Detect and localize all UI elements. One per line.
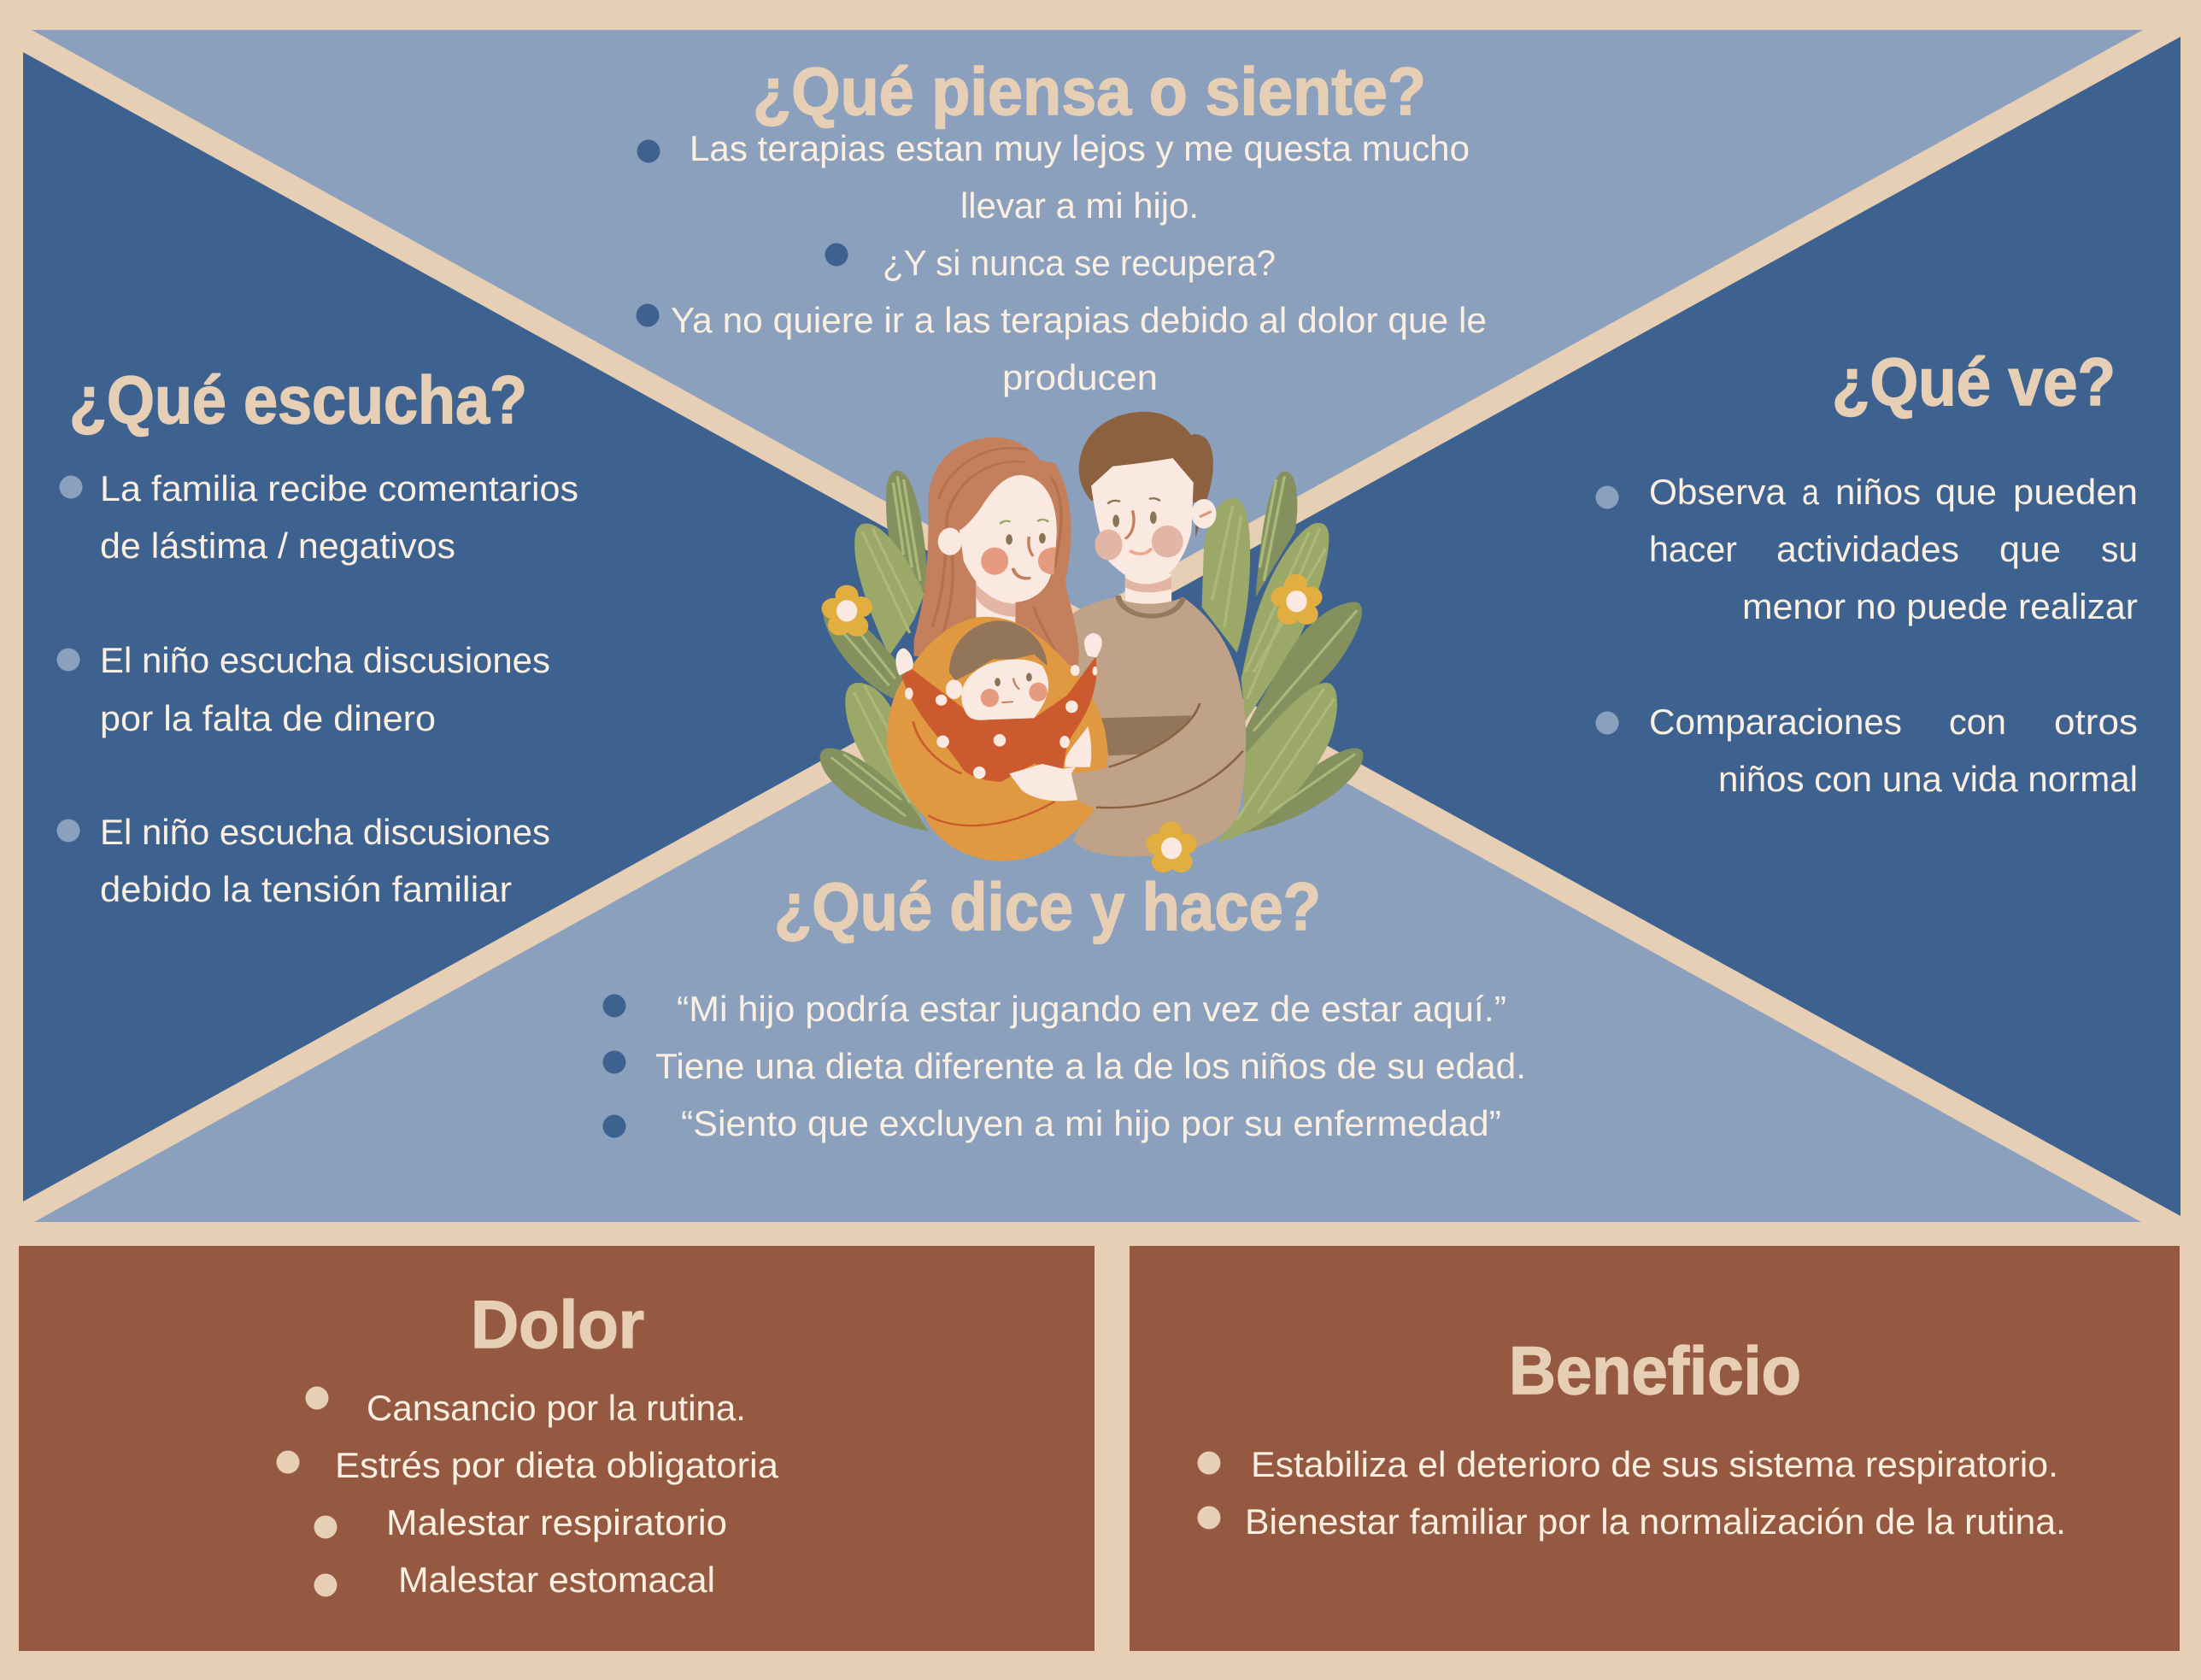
bullet list: lo que ve: hacer bbox=[1649, 529, 1737, 569]
bullet list: lo que ve: Observa bbox=[1649, 472, 1787, 512]
icon: man bbox=[1067, 412, 1246, 856]
panel: qué ve bbox=[1111, 37, 2180, 1216]
bullet list: lo que ve: actividades bbox=[1776, 529, 1959, 569]
bullet list: lo que ve: a bbox=[1802, 472, 1820, 512]
heading: qué escucha: ¿Qué escucha? bbox=[69, 361, 527, 438]
bullet list: pensamientos: Ya no quiere ir a las terapias debido al dolor que le bbox=[671, 300, 1487, 340]
bullet list: beneficios: Bienestar familiar por la normalización de la rutina. bbox=[1245, 1501, 2066, 1542]
bullet list: dolores: Cansancio por la rutina. bbox=[367, 1388, 746, 1428]
icon: baby bbox=[895, 620, 1102, 782]
bullet list: pensamientos: ¿Y si nunca se recupera? bbox=[883, 243, 1276, 283]
heading: dolor: Dolor bbox=[471, 1286, 644, 1362]
bullet list: lo que escucha: El niño escucha discusiones bbox=[100, 640, 550, 680]
bullet list: lo que escucha bbox=[56, 468, 578, 909]
heading: qué ve: ¿Qué ve? bbox=[1832, 344, 2116, 420]
bullet list: lo que ve: otros bbox=[2054, 702, 2138, 742]
bullet list: lo que ve bbox=[1596, 472, 2138, 799]
bullet list: lo que escucha: La familia recibe comentarios bbox=[100, 468, 578, 508]
bullet list: beneficios bbox=[1198, 1444, 2066, 1542]
bullet list: dolores: Estrés por dieta obligatoria bbox=[335, 1445, 779, 1485]
panel: beneficio bbox=[1130, 1246, 2180, 1651]
bullet list: pensamientos bbox=[636, 128, 1487, 397]
icon: left leaves bbox=[820, 471, 935, 831]
bullet list: dolores: Malestar estomacal bbox=[398, 1560, 715, 1600]
heading: beneficio: Beneficio bbox=[1509, 1332, 1801, 1408]
bullet list: dolores bbox=[277, 1386, 779, 1600]
bullet list: lo que ve: niños con una vida normal bbox=[1718, 759, 2138, 799]
bullet list: lo que ve: que bbox=[1935, 472, 1997, 512]
bullet list: lo que escucha: de lástima / negativos bbox=[100, 526, 455, 566]
bullet list: lo que ve: con bbox=[1949, 702, 2006, 742]
bullet list: lo que ve: que bbox=[1999, 529, 2061, 569]
bullet list: lo que ve: Comparaciones bbox=[1649, 702, 1902, 742]
panel: qué dice y hace bbox=[34, 640, 2141, 1222]
heading: qué piensa o siente: ¿Qué piensa o siente? bbox=[753, 53, 1426, 129]
bullet list: pensamientos: llevar a mi hijo. bbox=[960, 185, 1199, 226]
bullet list: dichos y acciones bbox=[603, 989, 1526, 1143]
panel: qué piensa o siente bbox=[32, 30, 2143, 613]
panel: qué escucha bbox=[23, 52, 1065, 1201]
bullet list: dolores: Malestar respiratorio bbox=[386, 1502, 727, 1542]
bullet list: dichos y acciones: Tiene una dieta diferente a la de los niños de su edad. bbox=[655, 1046, 1526, 1086]
bullet list: lo que ve: menor no puede realizar bbox=[1742, 586, 2138, 626]
panel: dolor bbox=[19, 1246, 1095, 1651]
icon: man's arm and hand bbox=[1009, 703, 1243, 810]
icon: flowers bbox=[822, 574, 1323, 872]
heading: qué dice y hace: ¿Qué dice y hace? bbox=[774, 868, 1321, 944]
bullet list: lo que ve: pueden bbox=[2013, 472, 2138, 512]
bullet list: lo que ve: su bbox=[2101, 529, 2138, 569]
icon: right leaves bbox=[1202, 471, 1364, 843]
bullet list: beneficios: Estabiliza el deterioro de sus sistema respiratorio. bbox=[1251, 1444, 2058, 1484]
bullet list: lo que escucha: El niño escucha discusiones bbox=[100, 812, 550, 852]
bullet list: lo que ve: niños bbox=[1835, 472, 1921, 512]
bullet list: lo que escucha: debido la tensión familiar bbox=[100, 869, 512, 909]
illustration: family with plants bbox=[820, 412, 1364, 872]
bullet list: pensamientos: Las terapias estan muy lejos y me questa mucho bbox=[690, 128, 1470, 168]
icon: woman bbox=[887, 438, 1108, 861]
bullet list: dichos y acciones: “Siento que excluyen a mi hijo por su enfermedad” bbox=[681, 1103, 1501, 1143]
bullet list: lo que escucha: por la falta de dinero bbox=[100, 698, 436, 738]
bullet list: pensamientos: producen bbox=[1002, 357, 1158, 397]
bullet list: dichos y acciones: “Mi hijo podría estar jugando en vez de estar aquí.” bbox=[677, 989, 1506, 1029]
